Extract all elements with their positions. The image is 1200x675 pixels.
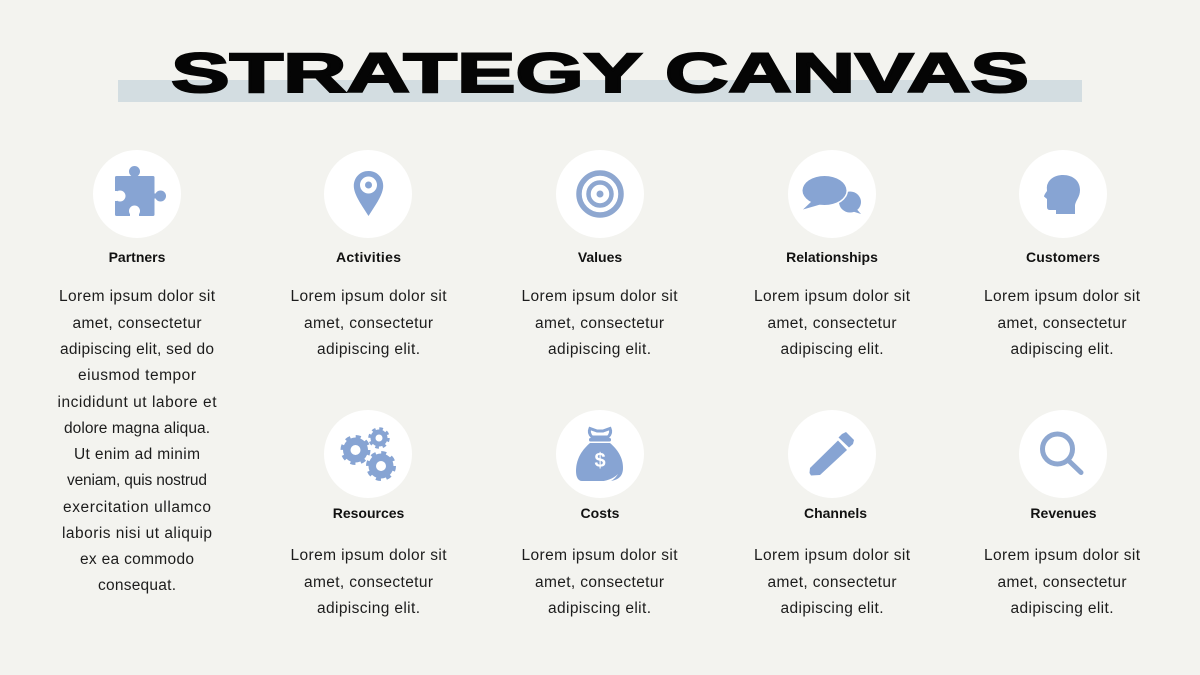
panel: activities [290, 150, 447, 358]
text block: costs [522, 547, 678, 617]
icon glyph: dollar sign: $ [594, 450, 606, 472]
icon: map pin [324, 150, 412, 238]
text block: partners: ex ea commodo [80, 551, 194, 568]
icon: pencil [788, 410, 876, 498]
text block: activities [290, 288, 447, 358]
text block: activities: adipiscing elit. [317, 341, 420, 358]
text block: values: adipiscing elit. [548, 341, 651, 358]
text block: costs: Lorem ipsum dolor sit [522, 547, 678, 564]
text block: relationships: adipiscing elit. [780, 341, 884, 358]
text block: customers [984, 288, 1141, 358]
heading: partners: Partners [109, 249, 166, 265]
heading: costs: Costs [581, 505, 620, 521]
icon: gears [324, 410, 412, 498]
icon: target [556, 150, 644, 238]
heading: revenues: Revenues [1030, 505, 1097, 521]
panel: channels [754, 410, 911, 617]
heading: values: Values [578, 249, 622, 265]
text block: activities: Lorem ipsum dolor sit [290, 288, 447, 305]
heading: channels: Channels [804, 505, 867, 521]
icon: money bag [556, 410, 644, 498]
text block: channels: amet, consectetur [768, 574, 896, 591]
text block: costs: adipiscing elit. [548, 600, 651, 617]
panel: partners [58, 150, 217, 594]
text block: partners: exercitation ullamco [63, 499, 211, 516]
text block: relationships: Lorem ipsum dolor sit [754, 288, 911, 305]
panel: revenues [984, 410, 1141, 617]
panel: values [522, 150, 678, 358]
text block: revenues: Lorem ipsum dolor sit [984, 547, 1141, 564]
text block: resources: Lorem ipsum dolor sit [290, 547, 447, 564]
text block: customers: adipiscing elit. [1010, 341, 1114, 358]
icon: magnifying glass [1019, 410, 1107, 498]
heading: customers: Customers [1026, 249, 1100, 265]
text block: partners [58, 288, 217, 594]
text block: partners: amet, consectetur [72, 315, 202, 332]
text block: partners: veniam, quis nostrud [67, 472, 207, 489]
text block: revenues: amet, consectetur [998, 574, 1126, 591]
text block: customers: amet, consectetur [998, 315, 1126, 332]
text block: partners: Lorem ipsum dolor sit [59, 288, 216, 305]
text block: values [522, 288, 678, 358]
panel: costs [522, 410, 678, 617]
panel: relationships [754, 150, 911, 358]
text block: activities: amet, consectetur [304, 315, 433, 332]
panel: customers [984, 150, 1141, 358]
text block: values: amet, consectetur [535, 315, 664, 332]
text block: partners: incididunt ut labore et [58, 394, 217, 411]
text block: revenues: adipiscing elit. [1010, 600, 1114, 617]
text block: channels: Lorem ipsum dolor sit [754, 547, 911, 564]
text block: partners: laboris nisi ut aliquip [62, 525, 212, 542]
text block: partners: Ut enim ad minim [74, 446, 200, 463]
text block: partners: adipiscing elit, sed do [60, 341, 214, 358]
text block: partners: consequat. [98, 577, 176, 594]
icon: puzzle piece [93, 150, 181, 238]
text block: resources [290, 547, 447, 617]
text block: customers: Lorem ipsum dolor sit [984, 288, 1141, 305]
title highlight bar [118, 80, 1082, 102]
text block: channels: adipiscing elit. [780, 600, 884, 617]
text block: partners: eiusmod tempor [78, 367, 196, 384]
text block: relationships: amet, consectetur [768, 315, 896, 332]
panel: resources [290, 410, 447, 617]
icon: head profile [1019, 150, 1107, 238]
text block: channels [754, 547, 911, 617]
text block: revenues [984, 547, 1141, 617]
text block: relationships [754, 288, 911, 358]
icon: speech bubbles [788, 150, 876, 238]
title: STRATEGY CANVAS [171, 41, 1029, 104]
text block: partners: dolore magna aliqua. [64, 420, 210, 437]
text block: resources: amet, consectetur [304, 574, 433, 591]
text block: resources: adipiscing elit. [317, 600, 420, 617]
heading: activities: Activities [336, 249, 401, 265]
text block: costs: amet, consectetur [535, 574, 664, 591]
text block: values: Lorem ipsum dolor sit [522, 288, 678, 305]
heading: relationships: Relationships [786, 249, 878, 265]
heading: resources: Resources [333, 505, 405, 521]
